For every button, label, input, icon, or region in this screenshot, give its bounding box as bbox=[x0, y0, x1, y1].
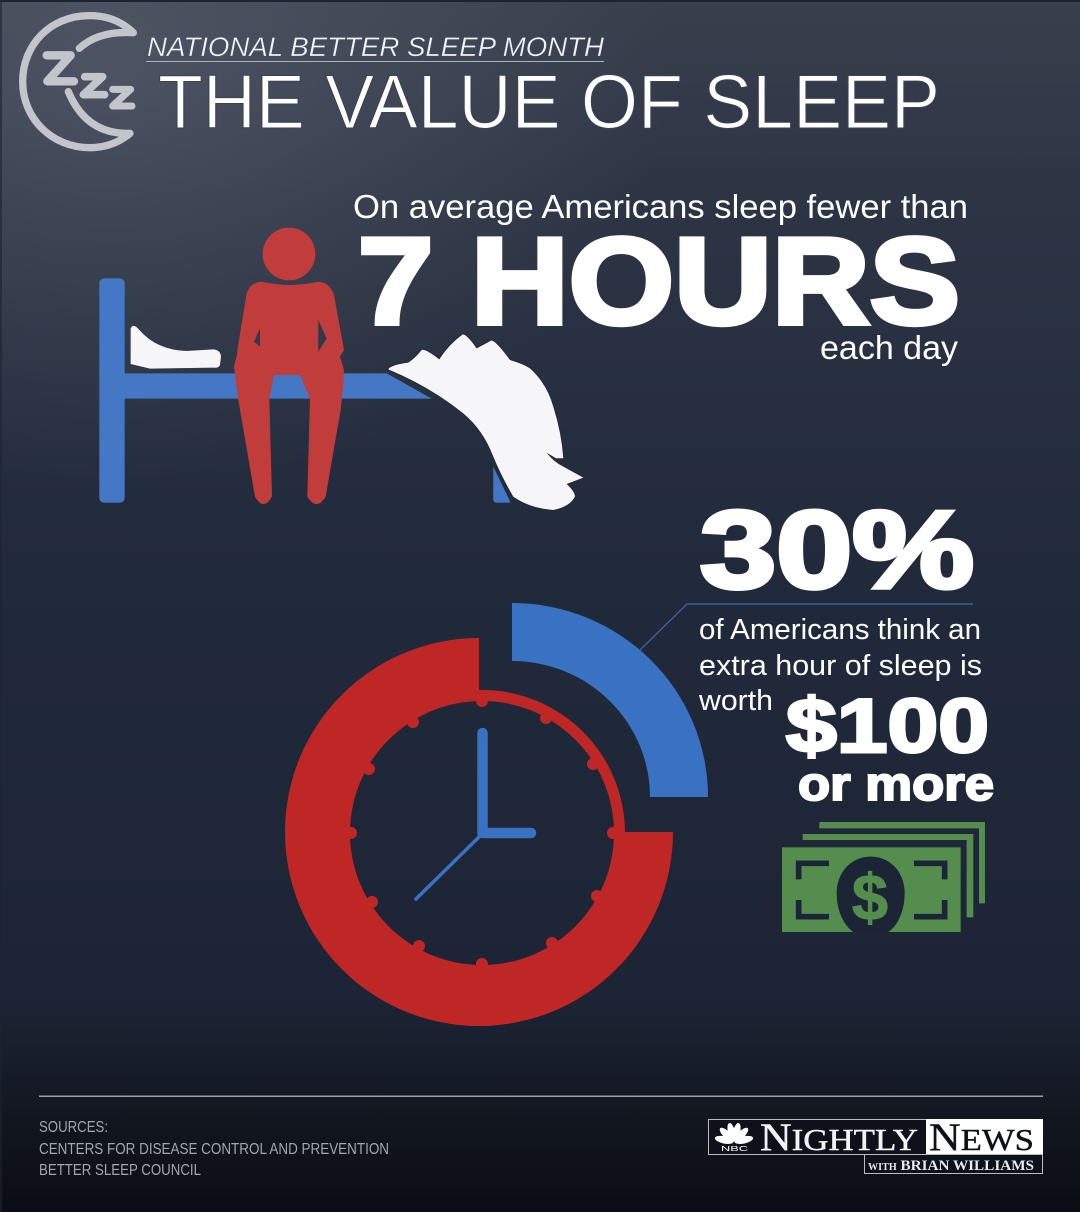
clock hands bbox=[416, 733, 531, 899]
subtitle: NATIONAL BETTER SLEEP MONTH bbox=[147, 32, 605, 62]
NBC peacock: NBC bbox=[721, 1146, 748, 1153]
sources bbox=[39, 1119, 389, 1179]
person bbox=[234, 228, 344, 504]
text: $100: $100 bbox=[786, 684, 989, 769]
sources: BETTER SLEEP COUNCIL bbox=[39, 1162, 201, 1179]
NBC peacock bbox=[714, 1122, 754, 1153]
icon: crescent moon with zzz bbox=[23, 16, 133, 148]
text: each day: each day bbox=[820, 329, 959, 366]
logo: NBC Nightly News: NIGHTLY bbox=[760, 1116, 918, 1159]
text: of Americans think bbox=[698, 614, 982, 717]
red segment 70% bbox=[285, 638, 673, 1026]
text: of Americans think: extra hour of sleep is bbox=[699, 650, 982, 682]
text: or more: or more bbox=[798, 757, 994, 810]
logo: NBC Nightly News: WITH BRIAN WILLIAMS bbox=[868, 1158, 1034, 1174]
text: 7 hours: 7 HOURS bbox=[358, 214, 960, 350]
text: 30%: 30% bbox=[700, 488, 974, 612]
sources: SOURCES: bbox=[39, 1119, 108, 1136]
blanket bbox=[388, 334, 583, 510]
icon: money stack bbox=[782, 822, 985, 933]
title: THE VALUE OF SLEEP bbox=[158, 60, 940, 145]
logo: NBC Nightly News bbox=[708, 1116, 1043, 1174]
callout line bbox=[640, 604, 973, 650]
blue segment 30% bbox=[512, 603, 708, 797]
clock ticks bbox=[345, 695, 619, 970]
text: on average: On average Americans sleep fewer than bbox=[353, 188, 968, 225]
sources: CENTERS FOR DISEASE CONTROL AND PREVENTION bbox=[39, 1141, 389, 1158]
logo: NBC Nightly News: NEWS bbox=[929, 1116, 1034, 1159]
bed frame bbox=[99, 278, 511, 503]
text: of Americans think: of Americans think an bbox=[699, 614, 981, 646]
pillow bbox=[131, 326, 221, 369]
icon: money stack: $ bbox=[852, 860, 888, 933]
donut chart: clock bbox=[285, 603, 708, 1026]
text: of Americans think: worth bbox=[698, 685, 773, 717]
illustration: person sitting on bed bbox=[99, 228, 583, 510]
